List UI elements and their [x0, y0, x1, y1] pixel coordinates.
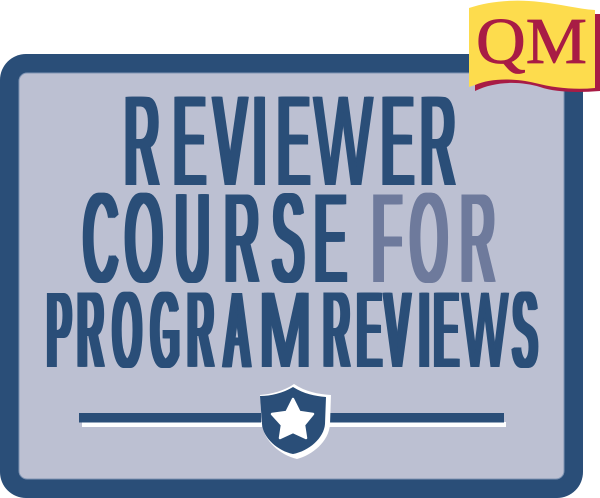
logo: QM flag — [469, 1, 600, 92]
icon: shield with star — [260, 384, 331, 459]
title line: COURSE FOR — [84, 168, 495, 310]
divider bar right — [325, 413, 506, 427]
title line: PROGRAM REVIEWS: M — [259, 270, 312, 390]
title line: PROGRAM REVIEWS: S — [513, 270, 537, 390]
title — [47, 71, 537, 390]
title line: PROGRAM REVIEWS: REVIE — [317, 270, 458, 390]
logo letters: QM: QM — [476, 5, 587, 78]
divider bar left — [79, 413, 262, 427]
title line: REVIEWER: ER — [382, 71, 455, 213]
title line: COURSE FOR: COURSE — [84, 168, 346, 310]
title line: REVIEWER: REVIE — [125, 71, 309, 213]
title line: PROGRAM REVIEWS: W — [462, 270, 508, 390]
title line: PROGRAM REVIEWS: PROGRA — [47, 270, 249, 390]
divider with shield — [79, 384, 506, 459]
title line: REVIEWER: W — [314, 71, 372, 213]
icon: star — [272, 399, 313, 438]
title line: COURSE FOR: FOR — [373, 168, 495, 310]
